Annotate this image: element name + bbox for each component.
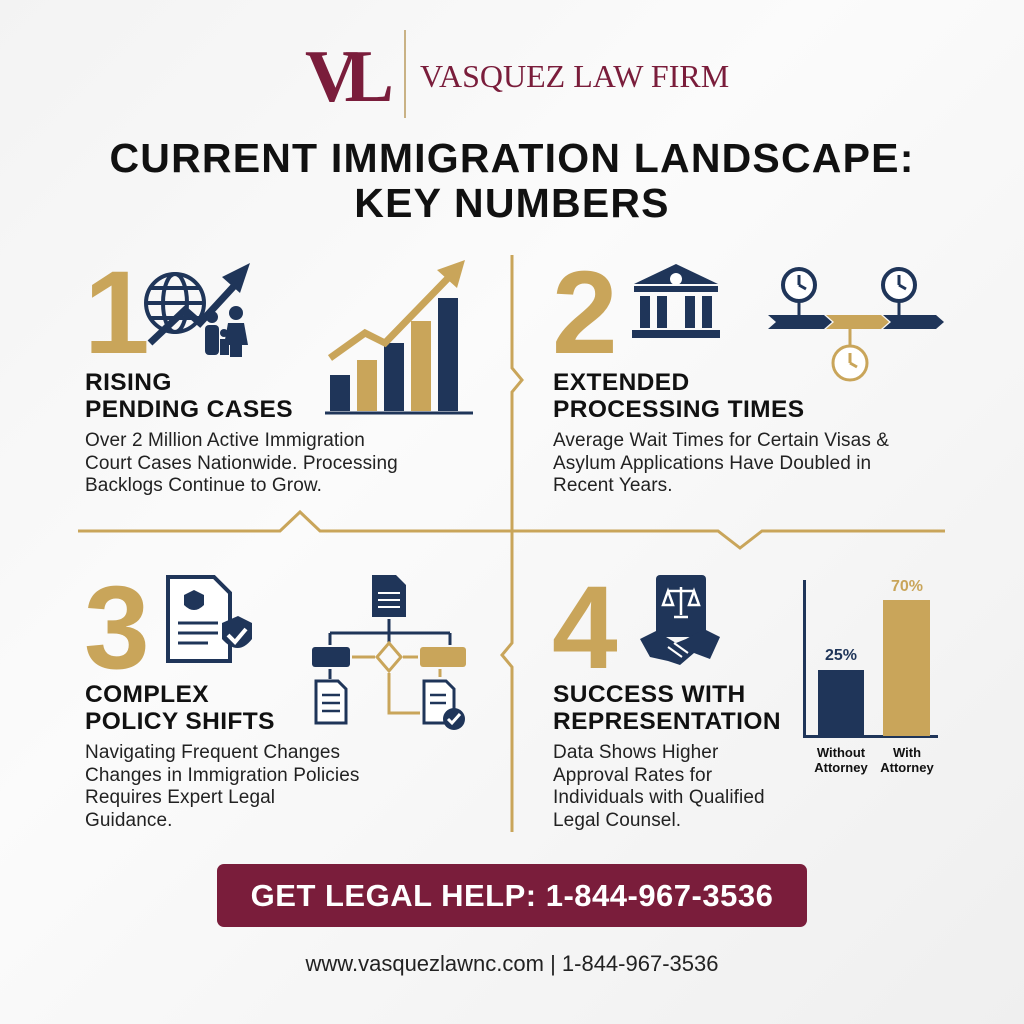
number 2: 2 xyxy=(552,247,618,379)
title: KEY NUMBERS xyxy=(354,180,670,226)
icon: document with shield xyxy=(166,575,252,663)
bar chart: approval rates: 70% xyxy=(891,578,923,595)
icon: law book with handshake xyxy=(640,575,720,665)
icon: timeline clocks xyxy=(768,267,944,382)
icon: courthouse xyxy=(632,264,720,338)
bar chart: approval rates xyxy=(803,578,938,775)
body text: Average Wait Times for Certain Visas & Asylum Applications Have Doubled in Recent Years. xyxy=(553,430,889,496)
heading xyxy=(85,369,293,423)
heading: SUCCESS WITH xyxy=(553,681,746,708)
bar chart: approval rates: With Attorney xyxy=(880,745,934,775)
heading: EXTENDED xyxy=(553,369,690,396)
icon: globe with arrow and family xyxy=(144,263,250,357)
bar chart: approval rates: 25% xyxy=(825,647,857,664)
heading: PENDING CASES xyxy=(85,396,293,423)
body text: Data Shows Higher Approval Rates for Individuals with Qualified Legal Counsel. xyxy=(553,742,765,830)
heading: COMPLEX xyxy=(85,681,209,708)
panel 2 xyxy=(552,247,944,496)
call to action button: GET LEGAL HELP: 1-844-967-3536 xyxy=(251,878,773,913)
number 4: 4 xyxy=(552,562,618,694)
panel 1 xyxy=(84,247,473,496)
title xyxy=(109,135,915,226)
heading xyxy=(553,681,781,735)
title: CURRENT IMMIGRATION LANDSCAPE: xyxy=(109,135,915,181)
firm name: VASQUEZ LAW FIRM xyxy=(420,58,729,94)
heading: PROCESSING TIMES xyxy=(553,396,804,423)
number 1: 1 xyxy=(84,247,150,379)
logo monogram: VL xyxy=(305,36,380,118)
heading: POLICY SHIFTS xyxy=(85,708,275,735)
heading xyxy=(553,369,804,423)
bar chart: approval rates: Without Attorney xyxy=(814,745,868,775)
logo xyxy=(305,30,729,118)
panel 3 xyxy=(84,562,466,830)
bar chart: rising xyxy=(325,260,473,414)
heading: RISING xyxy=(85,369,172,396)
panel 4 xyxy=(552,562,938,830)
call to action button xyxy=(217,864,807,927)
heading xyxy=(85,681,275,735)
footer contact: www.vasquezlawnc.com | 1-844-967-3536 xyxy=(306,951,718,976)
heading: REPRESENTATION xyxy=(553,708,781,735)
body text: Navigating Frequent Changes Changes in Immigration Policies Requires Expert Legal Guidance. xyxy=(85,742,360,830)
icon: flowchart xyxy=(312,575,466,730)
number 3: 3 xyxy=(84,562,150,694)
body text: Over 2 Million Active Immigration Court Cases Nationwide. Processing Backlogs Continue to Grow. xyxy=(85,430,398,496)
